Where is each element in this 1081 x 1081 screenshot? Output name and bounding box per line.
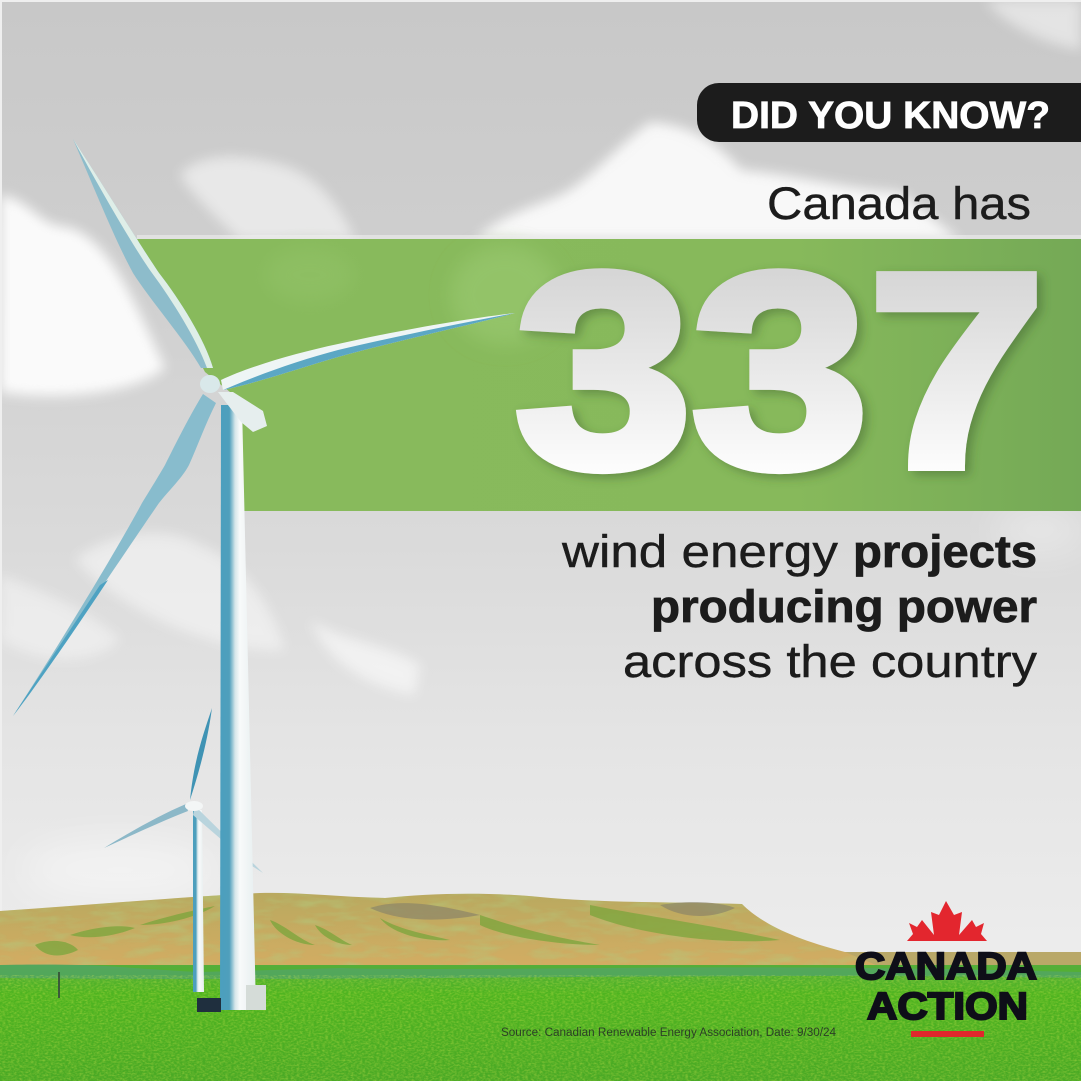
- small turbine left blade: [104, 804, 188, 848]
- small turbine right blade: [193, 806, 263, 873]
- green highlight band: [137, 235, 1081, 511]
- hill grass patches: [35, 905, 780, 955]
- small turbine hub: [185, 801, 203, 811]
- large foreground wind turbine: [13, 139, 515, 1012]
- small windmill on field: [58, 972, 60, 998]
- icon: red maple leaf: [907, 901, 987, 941]
- lower blade: [13, 394, 216, 716]
- heading pill: did you know: DID YOU KNOW?: [731, 95, 1050, 137]
- big number 337: 337: [515, 217, 1045, 525]
- grass texture: [0, 975, 1081, 1081]
- body statement: [561, 526, 1038, 687]
- body statement: wind energy: [561, 526, 839, 577]
- base stairs: [246, 985, 266, 1010]
- source note: Source: Canadian Renewable Energy Association, Date: 9/30/24: [501, 1027, 837, 1039]
- landscape: hills and green field: [0, 890, 1081, 1081]
- right blade: [221, 313, 515, 390]
- body statement: projects: [853, 526, 1037, 577]
- small background wind turbine: [59, 708, 263, 998]
- logo word: canada: CANADA: [855, 946, 1037, 988]
- small turbine tower: [193, 810, 204, 992]
- tower: [220, 405, 256, 1010]
- nacelle: [218, 392, 267, 432]
- intro text: Canada has: [767, 178, 1031, 229]
- base equipment: [197, 998, 221, 1012]
- rocky outcrops: [370, 902, 735, 920]
- grass band near the hills: [0, 965, 1081, 979]
- hill texture: [0, 894, 858, 965]
- distant plain: [780, 952, 1081, 975]
- grass field: [0, 965, 1081, 1081]
- logo word: action: ACTION: [867, 986, 1028, 1028]
- hill: [0, 893, 900, 975]
- logo red bar: [911, 1031, 984, 1037]
- Canada Action logo: [855, 901, 1037, 1037]
- body statement: across the country: [623, 636, 1038, 687]
- small turbine up blade: [190, 708, 212, 800]
- upper blade: [73, 139, 213, 368]
- hub: [200, 375, 220, 393]
- heading pill: did you know: [697, 83, 1081, 142]
- body statement: producing power: [651, 581, 1037, 632]
